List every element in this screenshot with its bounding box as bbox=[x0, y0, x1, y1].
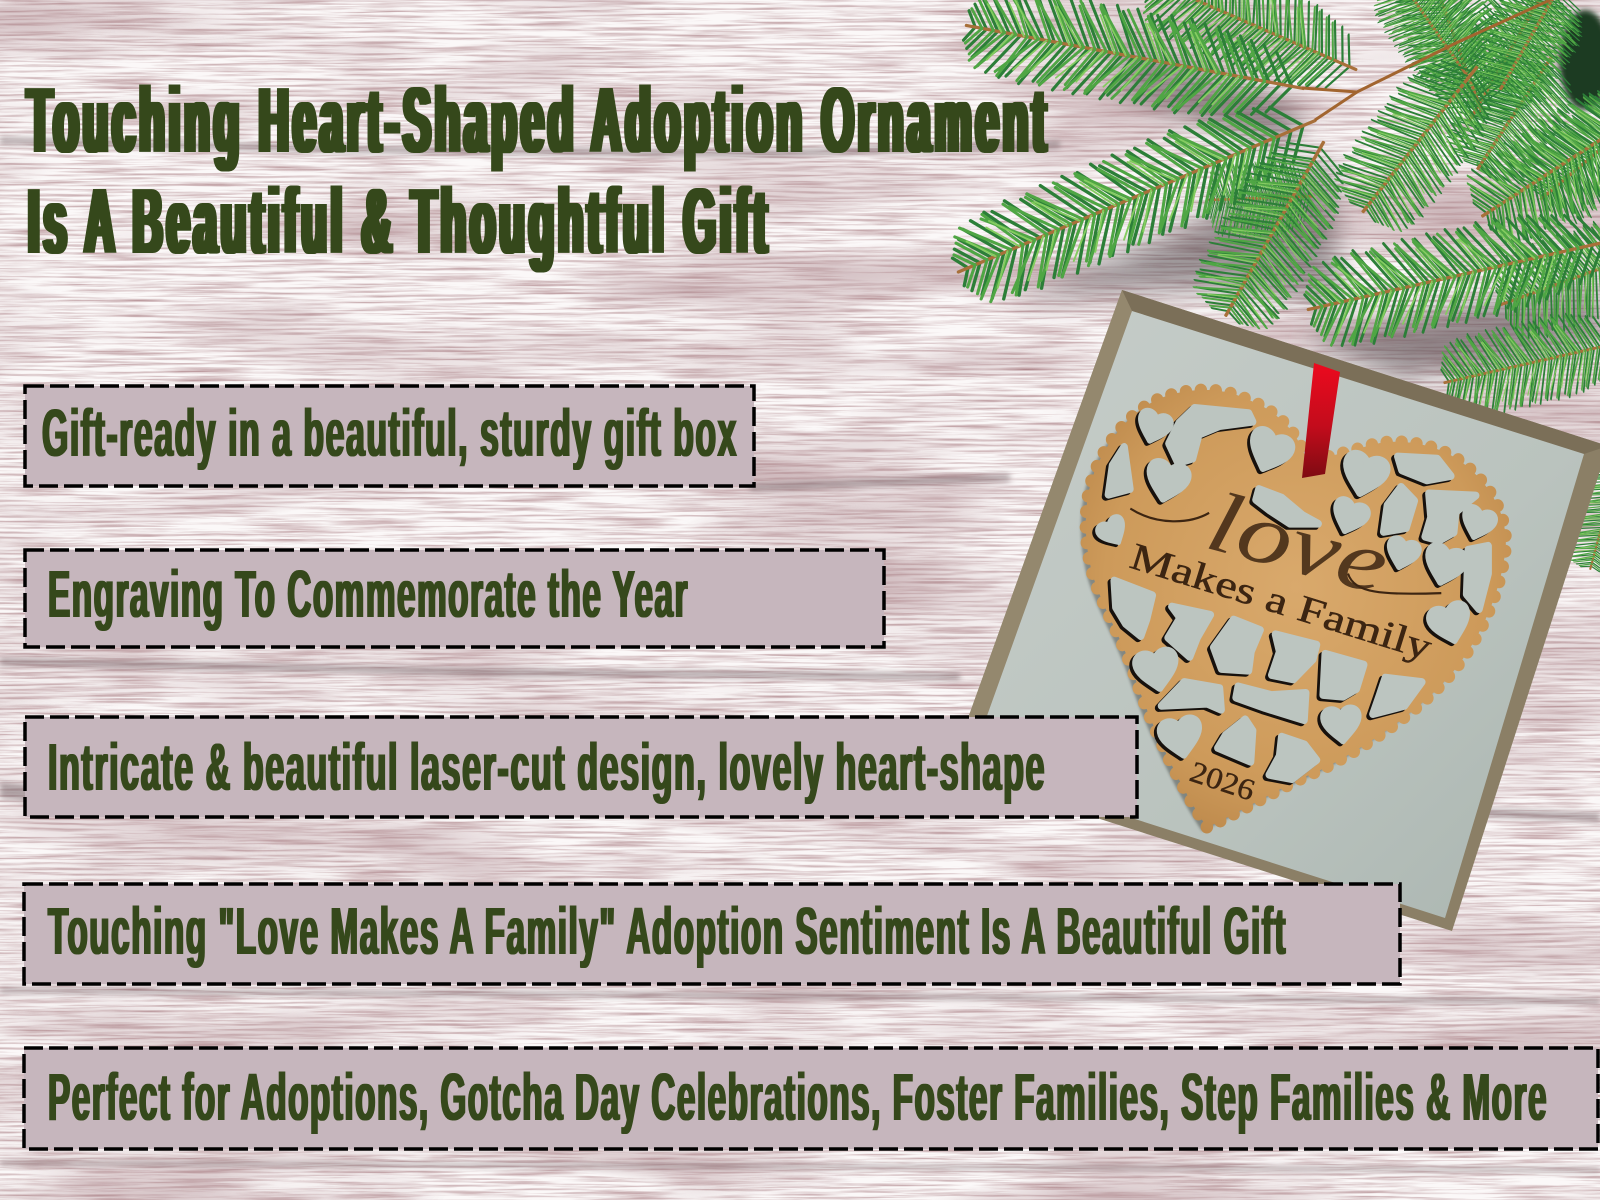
pine branches bbox=[940, 0, 1600, 577]
feature label: gift box bbox=[25, 386, 754, 486]
shadow of pine branches on the wood bbox=[1010, 45, 1600, 380]
ribbon bbox=[1302, 363, 1340, 478]
title bbox=[27, 68, 1050, 273]
engraved year: 2026 bbox=[1186, 755, 1259, 807]
feature label: laser-cut design bbox=[25, 717, 1137, 817]
feature label: sentiment bbox=[24, 884, 1400, 984]
heart ornament bbox=[1081, 363, 1506, 831]
ornament wood with cut-outs bbox=[1086, 390, 1506, 827]
box walls bbox=[949, 290, 1600, 931]
ornament drop shadow bbox=[1081, 394, 1501, 831]
box floor bbox=[969, 311, 1584, 918]
engraved makes a family: Makes a Family bbox=[1125, 535, 1437, 669]
feature label: engraving bbox=[25, 550, 884, 647]
feature label: engraving: Engraving To Commemorate the Year bbox=[48, 557, 689, 632]
gift box bbox=[949, 290, 1600, 931]
engraved love: love bbox=[1198, 473, 1399, 612]
feature label: gift box: Gift-ready in a beautiful, sturdy gift box bbox=[42, 396, 738, 471]
